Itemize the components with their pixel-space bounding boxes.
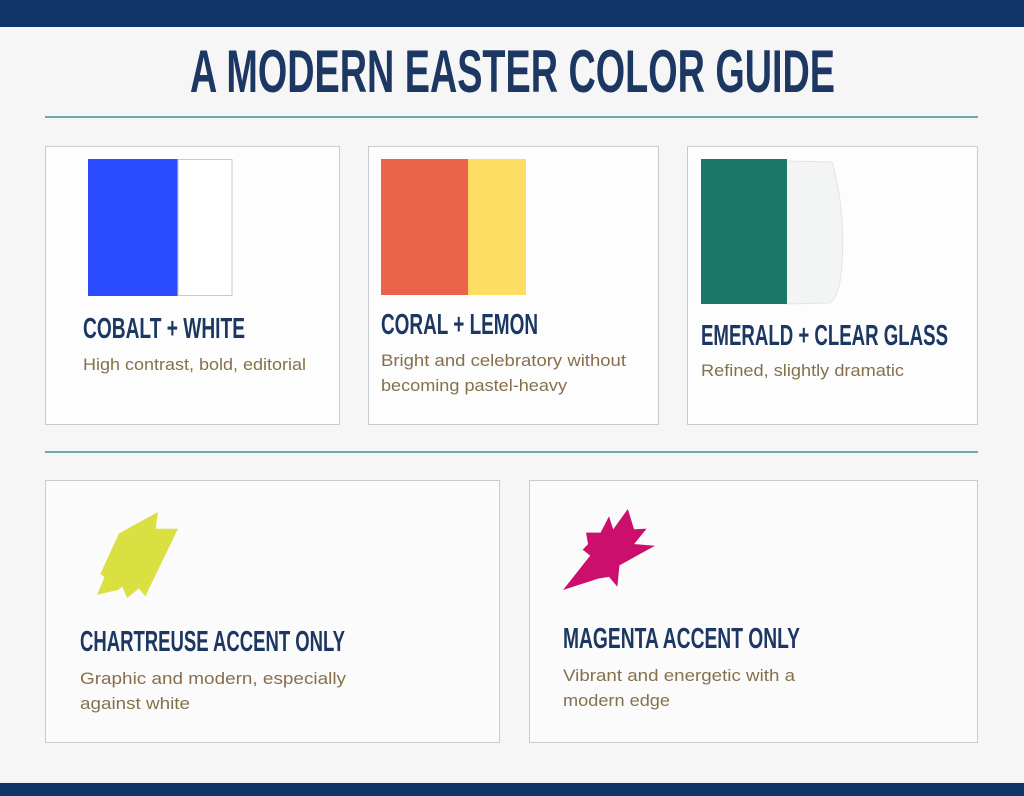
panel: emerald + clear glass bbox=[688, 146, 978, 424]
icon: chartreuse shard bbox=[97, 512, 178, 598]
description: magenta: Vibrant and energetic with a bbox=[563, 666, 796, 685]
swatch: coral and lemon bbox=[381, 159, 526, 295]
description: chartreuse: Graphic and modern, especially bbox=[80, 669, 347, 688]
description: coral: Bright and celebratory without bbox=[381, 351, 626, 370]
panel: chartreuse accent bbox=[46, 480, 500, 742]
panel: magenta accent bbox=[530, 480, 978, 742]
heading: chartreuse: CHARTREUSE ACCENT ONLY bbox=[80, 626, 345, 658]
heading: cobalt + white: COBALT + WHITE bbox=[83, 313, 245, 345]
description: chartreuse: against white bbox=[80, 694, 190, 713]
bottom bar bbox=[0, 783, 1024, 796]
panel: cobalt + white bbox=[46, 146, 340, 424]
description: cobalt: High contrast, bold, editorial bbox=[83, 355, 306, 374]
heading: magenta: MAGENTA ACCENT ONLY bbox=[563, 623, 800, 655]
swatch: cobalt and white bbox=[88, 159, 232, 296]
description: magenta: modern edge bbox=[563, 691, 670, 710]
top bar bbox=[0, 0, 1024, 27]
swatch: emerald and clear glass bbox=[701, 159, 843, 304]
icon: magenta starburst bbox=[563, 509, 655, 590]
description: coral bbox=[381, 351, 626, 395]
description: coral: becoming pastel-heavy bbox=[381, 376, 568, 395]
heading: coral + lemon: CORAL + LEMON bbox=[381, 309, 538, 341]
description: magenta bbox=[563, 666, 796, 710]
description: chartreuse bbox=[80, 669, 347, 713]
panel: coral + lemon bbox=[368, 146, 658, 424]
description: emerald: Refined, slightly dramatic bbox=[701, 361, 905, 380]
